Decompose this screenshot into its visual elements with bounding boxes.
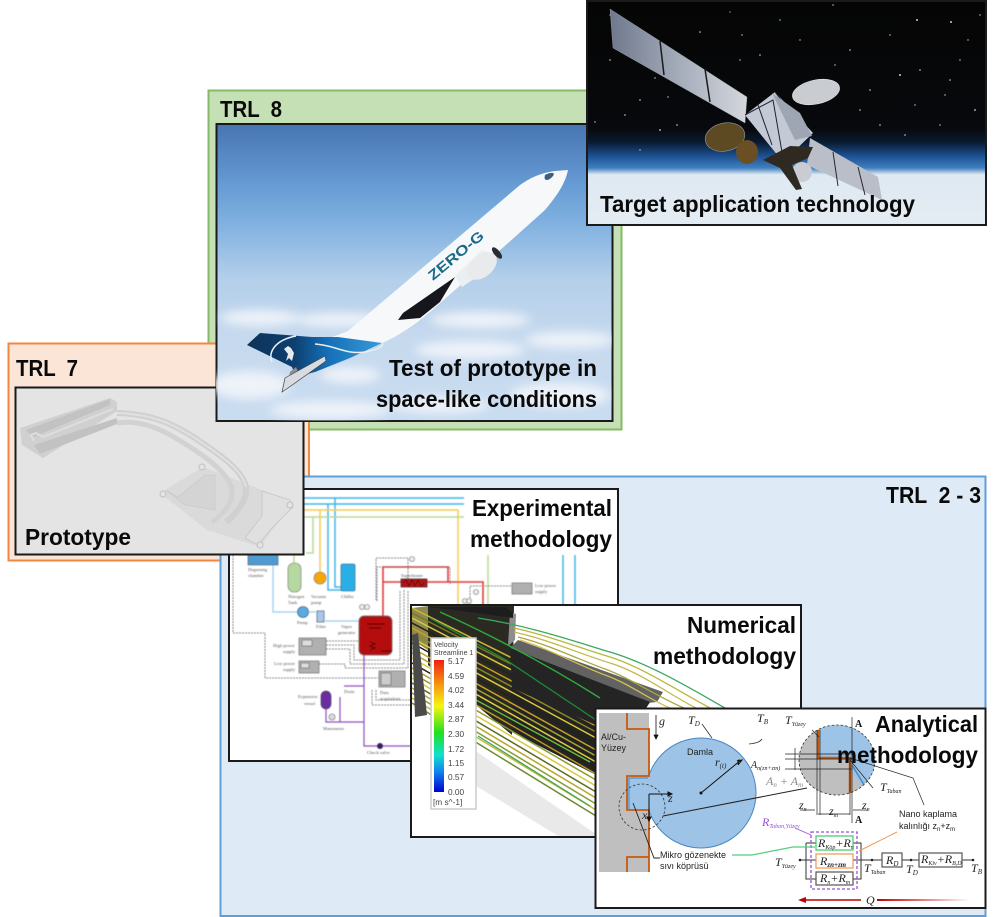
heading: TRL 8: TRL 8 [220, 96, 282, 122]
magnified nano-coating detail: z [798, 798, 807, 813]
illustration: heat pipe prototype [20, 398, 293, 548]
process and instrumentation diagram [229, 498, 575, 755]
velocity legend: 2.30 [448, 729, 465, 739]
process and instrumentation diagram: Superheater [401, 573, 423, 578]
caption: test of prototype: space-like conditions [376, 386, 597, 412]
process and instrumentation diagram: Filter [316, 624, 326, 629]
droplet on micro-porous surface diagram: r [715, 755, 727, 770]
process and instrumentation diagram: High power [273, 643, 295, 648]
velocity legend: 1.15 [448, 758, 465, 768]
heading: experimental methodology: Experimental [472, 495, 612, 521]
droplet on micro-porous surface diagram: A [765, 774, 803, 789]
velocity legend: Streamline 1 [434, 650, 473, 657]
velocity legend: 4.02 [448, 685, 465, 695]
process and instrumentation diagram: supply [535, 589, 548, 594]
droplet on micro-porous surface diagram: Al/Cu- [601, 732, 626, 742]
heading: TRL 7: TRL 7 [16, 355, 78, 381]
droplet on micro-porous surface diagram: T [688, 713, 700, 728]
thermal resistance circuit: Köp [824, 845, 835, 851]
magnified nano-coating detail: A [855, 719, 863, 730]
process and instrumentation diagram: Low power [535, 583, 557, 588]
CFD streamlines and fin geometry [412, 606, 725, 837]
thermal resistance circuit: zn+zm [826, 861, 847, 869]
caption: test of prototype [376, 355, 597, 412]
heading: numerical methodology: methodology [653, 643, 796, 669]
panel: numerical methodology [411, 605, 801, 837]
caption: target application technology: Target application technology [600, 191, 915, 217]
thermal resistance circuit: R [920, 852, 962, 867]
magnified nano-coating detail: z [861, 798, 870, 813]
thermal resistance circuit: Taban,Yüzey [769, 824, 800, 830]
thermal resistance circuit: R [817, 836, 854, 851]
process and instrumentation diagram: Tank [288, 600, 298, 605]
magnified nano-coating detail: z [828, 804, 839, 819]
velocity legend: 0.57 [448, 772, 465, 782]
thermal resistance circuit: T [971, 861, 983, 876]
panel: experimental methodology [229, 489, 618, 761]
droplet on micro-porous surface diagram: n [937, 827, 940, 833]
thermal resistance circuit: B [978, 868, 983, 876]
thermal resistance circuit: D [912, 869, 918, 877]
panel: satellite image [587, 1, 986, 225]
thermal resistance circuit: Yüzey [782, 864, 796, 870]
illustration: satellite [610, 9, 882, 200]
droplet on micro-porous surface diagram: m [950, 827, 955, 833]
droplet on micro-porous surface diagram: z [667, 791, 673, 805]
thermal resistance circuit: T [775, 855, 796, 870]
process and instrumentation diagram: acquisition [380, 696, 401, 701]
process and instrumentation diagram: Vacuum [311, 594, 326, 599]
velocity legend: Velocity [434, 642, 459, 649]
process and instrumentation diagram: generator [338, 630, 356, 635]
velocity legend: 4.59 [448, 671, 465, 681]
panel: TRL 7 [8, 344, 309, 560]
heading: TRL 2-3: TRL 2 - 3 [886, 482, 981, 508]
velocity legend: 0.00 [448, 787, 465, 797]
heading: analytical methodology: Analytical [875, 711, 978, 737]
process and instrumentation diagram: Pump [297, 620, 308, 625]
thermal resistance circuit: Taban [871, 870, 885, 876]
thermal resistance circuit: R [819, 871, 851, 886]
magnified nano-coating detail [785, 713, 924, 826]
process and instrumentation diagram: Check valve [367, 750, 390, 755]
panel: analytical methodology [596, 708, 986, 908]
thermal resistance circuit: Kiv [927, 861, 937, 867]
magnified nano-coating detail: T [880, 780, 901, 795]
heading: experimental methodology [470, 495, 612, 552]
process and instrumentation diagram: supply [283, 649, 296, 654]
heading: analytical methodology: methodology [837, 742, 978, 768]
droplet on micro-porous surface diagram: +z [940, 821, 951, 831]
process and instrumentation diagram: pump [311, 600, 322, 605]
velocity legend [431, 638, 476, 809]
thermal resistance circuit: m [846, 880, 851, 886]
velocity legend: 5.17 [448, 656, 465, 666]
process and instrumentation diagram: Data [380, 690, 389, 695]
process and instrumentation diagram: chamber [248, 573, 264, 578]
droplet on micro-porous surface diagram: D [694, 720, 700, 728]
droplet on micro-porous surface diagram: T [757, 711, 769, 726]
thermal resistance circuit: R [819, 854, 847, 869]
process and instrumentation diagram: supply [283, 667, 296, 672]
droplet on micro-porous surface diagram: Damla [687, 747, 713, 757]
panel: prototype image [16, 388, 304, 554]
velocity legend: [m s^-1] [433, 797, 462, 807]
droplet on micro-porous surface diagram [599, 711, 957, 872]
process and instrumentation diagram: Expansion [298, 694, 318, 699]
droplet on micro-porous surface diagram: m [798, 781, 803, 789]
panel: TRL 8 [208, 90, 622, 430]
thermal resistance circuit: R [761, 815, 800, 830]
thermal resistance circuit [732, 815, 983, 907]
magnified nano-coating detail: n [804, 807, 807, 813]
droplet on micro-porous surface diagram: g [659, 714, 665, 728]
velocity legend: 2.87 [448, 714, 465, 724]
process and instrumentation diagram: Low power [274, 661, 296, 666]
magnified nano-coating detail: n [867, 807, 870, 813]
droplet on micro-porous surface diagram: n(zn+zm) [757, 765, 780, 772]
magnified nano-coating detail: Yüzey [792, 722, 806, 728]
droplet on micro-porous surface diagram: A [750, 760, 780, 772]
thermal resistance circuit: n [827, 880, 830, 886]
process and instrumentation diagram: Degassing [248, 567, 268, 572]
thermal resistance circuit: T [864, 861, 885, 876]
caption: prototype: Prototype [25, 524, 131, 550]
thermal resistance circuit: B,D [952, 861, 962, 867]
magnified nano-coating detail: m [834, 813, 839, 819]
droplet on micro-porous surface diagram: B [764, 718, 769, 726]
droplet on micro-porous surface diagram: + A [777, 774, 799, 788]
caption: test of prototype: Test of prototype in [389, 355, 597, 381]
heading: numerical methodology [653, 612, 796, 669]
thermal resistance circuit: Q [866, 893, 875, 907]
process and instrumentation diagram: Drain [344, 689, 355, 694]
thermal resistance circuit: n [851, 845, 854, 851]
droplet on micro-porous surface diagram: Mikro gözenekte [660, 850, 726, 860]
panel: zero-g aircraft image [210, 124, 615, 421]
thermal resistance circuit: +R [835, 836, 851, 850]
heading: analytical methodology [837, 711, 978, 768]
velocity legend: 1.72 [448, 744, 465, 754]
process and instrumentation diagram: Vapor [341, 624, 352, 629]
thermal resistance circuit: T [906, 862, 918, 877]
illustration: zero-g aircraft: ZERO-G [425, 227, 487, 283]
droplet on micro-porous surface diagram: kalınlığı z [899, 821, 955, 833]
thermal resistance circuit: +R [830, 871, 846, 885]
illustration: zero-g aircraft [247, 170, 568, 392]
velocity legend: 3.44 [448, 700, 465, 710]
droplet on micro-porous surface diagram: n [773, 781, 777, 789]
droplet on micro-porous surface diagram: x [641, 808, 648, 822]
droplet on micro-porous surface diagram: Nano kaplama [899, 809, 957, 819]
heading: numerical methodology: Numerical [687, 612, 796, 638]
heading: experimental methodology: methodology [470, 526, 612, 552]
thermal resistance circuit: R [885, 853, 898, 868]
process and instrumentation diagram: Nitrogen [288, 594, 305, 599]
droplet on micro-porous surface diagram: (t) [720, 762, 727, 770]
magnified nano-coating detail: Taban [887, 789, 901, 795]
magnified nano-coating detail: A [855, 815, 863, 826]
process and instrumentation diagram: Chiller [341, 594, 354, 599]
process and instrumentation diagram: Manometer [323, 726, 345, 731]
thermal resistance circuit: D [892, 860, 898, 868]
magnified nano-coating detail: T [785, 713, 806, 728]
droplet on micro-porous surface diagram: sıvı köprüsü [660, 861, 709, 871]
thermal resistance circuit: +R [937, 852, 953, 866]
droplet on micro-porous surface diagram: Yüzey [601, 743, 627, 753]
process and instrumentation diagram: vessel [304, 701, 316, 706]
